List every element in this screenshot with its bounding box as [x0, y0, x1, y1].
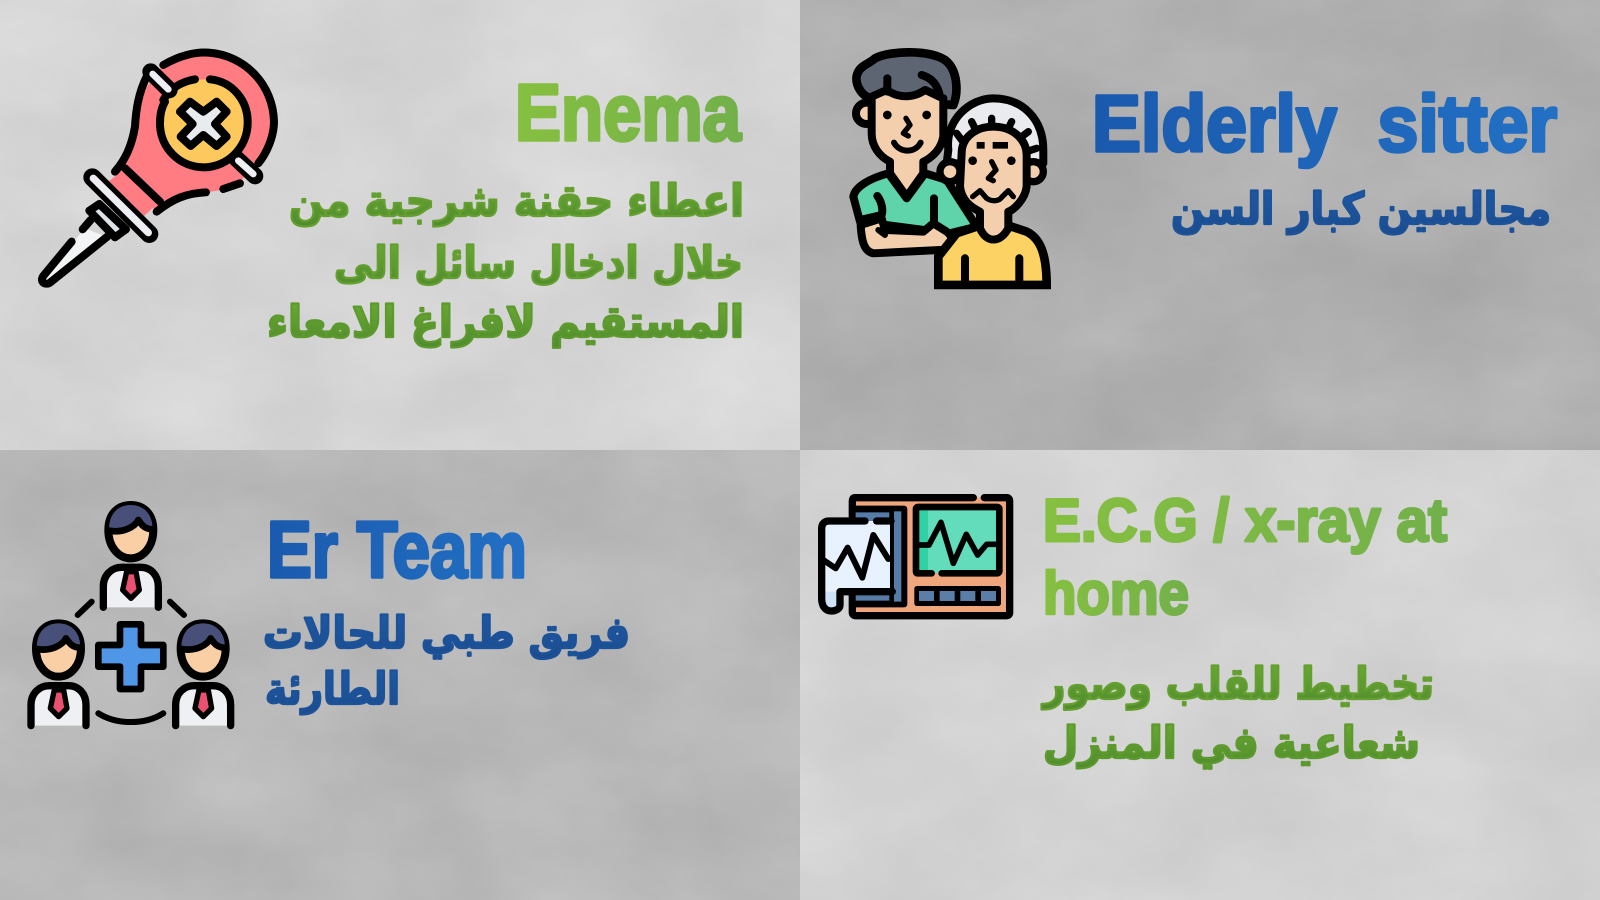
- text: elderly sitter description: مجالسين كبار السن: [1171, 184, 1551, 235]
- person left: [31, 623, 86, 726]
- person right: [176, 623, 231, 726]
- panel: enema: [0, 0, 800, 450]
- title: Enema: Enema: [515, 68, 741, 157]
- connector arcs: [78, 602, 184, 722]
- text: enema description line 1: اعطاء حقنة شرجية من: [289, 176, 744, 227]
- icon: enema bulb: [42, 52, 274, 284]
- text: ecg description line 1: تخطيط للقلب وصور: [1041, 659, 1434, 710]
- title: Elderly sitter: Elderly sitter: [1092, 79, 1557, 168]
- panel: er team: [0, 450, 800, 900]
- icon: caregiver and elder: [853, 52, 1047, 285]
- icon: medical team: [31, 505, 231, 726]
- text: er team description line 2: الطارئة: [265, 664, 400, 715]
- icon: medical cross: [98, 624, 163, 689]
- person top: [103, 505, 158, 607]
- text: er team description line 1: فريق طبي للحالات: [263, 608, 630, 659]
- icon: ecg monitor: [822, 498, 1010, 616]
- panel: elderly sitter: [800, 0, 1600, 450]
- title: Er Team: Er Team: [267, 505, 527, 594]
- text: enema description line 3: المستقيم لافراغ الامعاء: [267, 297, 744, 348]
- title: ecg / x-ray at home line 1: E.C.G / x-ray at: [1043, 487, 1447, 554]
- text: ecg description line 2: شعاعية في المنزل: [1043, 718, 1420, 769]
- panel: ecg and x-ray: [800, 450, 1600, 900]
- title: ecg / x-ray at home line 2: home: [1043, 560, 1189, 627]
- text: enema description line 2: خلال ادخال سائل الى: [334, 238, 743, 289]
